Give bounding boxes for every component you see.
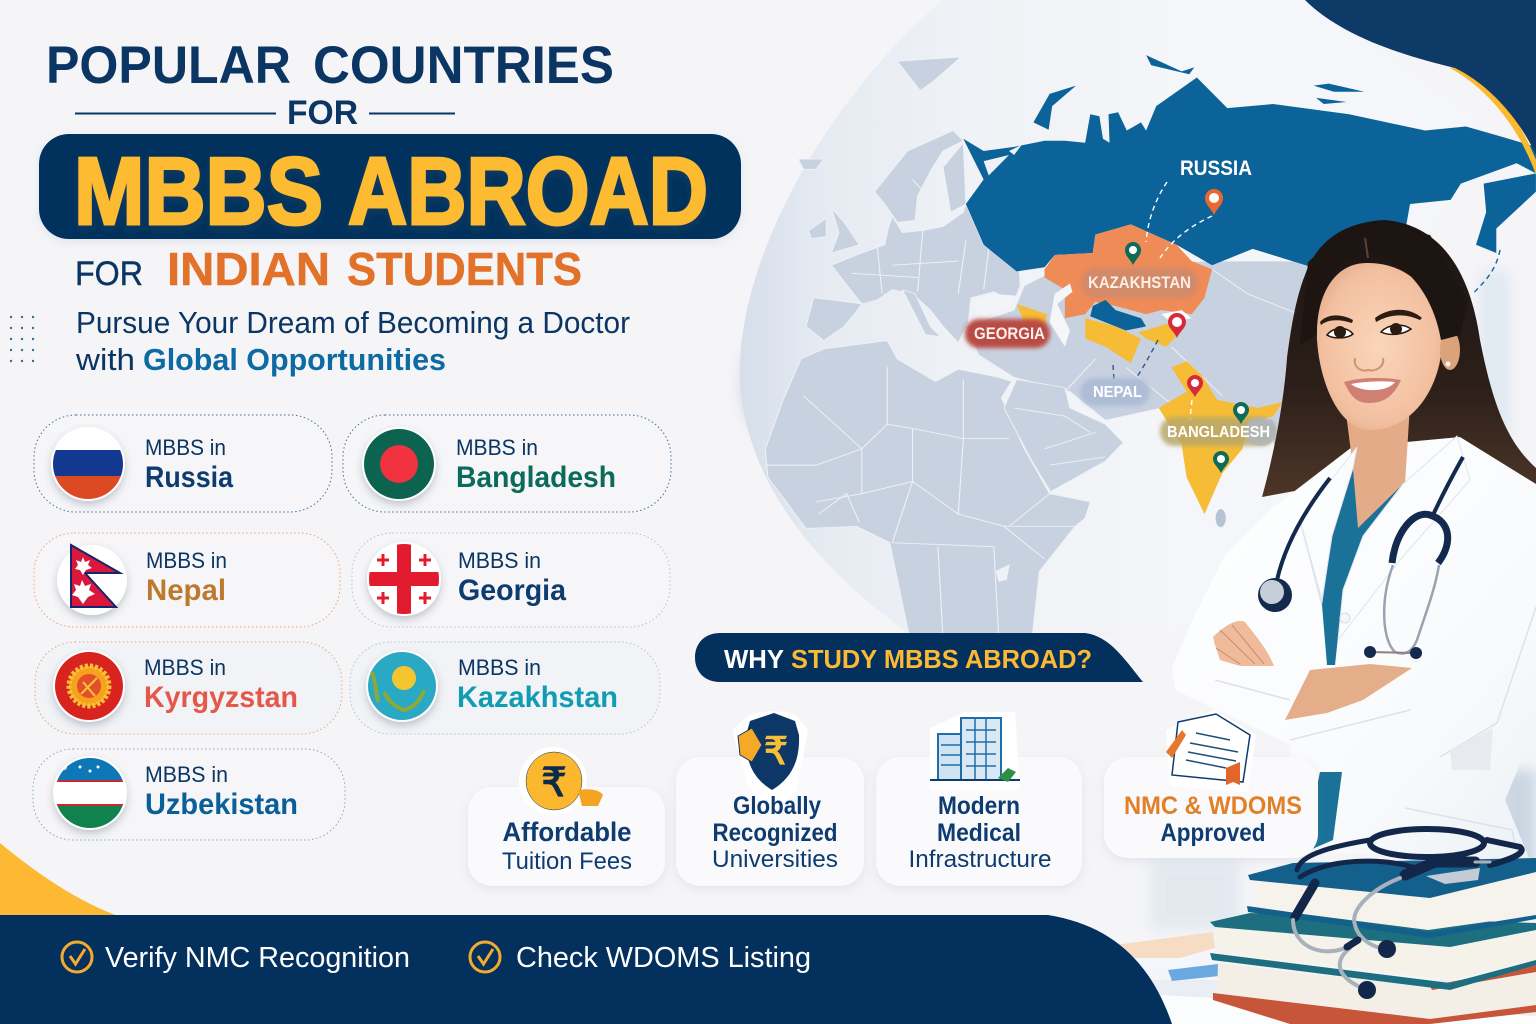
check: NMC: Verify NMC Recognition (105, 942, 410, 974)
Far-east Russia (1476, 173, 1536, 253)
bottom book pages (1217, 963, 1536, 1020)
card: Kyrgyzstan: Kyrgyzstan (144, 681, 298, 714)
country borders (765, 180, 1298, 640)
card: Kazakhstan: MBBS in (458, 655, 541, 680)
blue lake area (1090, 300, 1146, 330)
icon: shield: ₹ (764, 731, 788, 773)
Britain (831, 208, 859, 253)
card: Russia: MBBS in (145, 435, 226, 460)
feature: infrastructure: Medical (937, 819, 1021, 847)
card: Nepal (34, 533, 340, 627)
card: Uzbekistan (33, 749, 345, 840)
feature: recognized: Universities (712, 846, 838, 873)
Svalbard (897, 57, 961, 91)
desk front edge (1160, 995, 1536, 1024)
Russia (963, 78, 1536, 271)
White Sea gap (984, 145, 1022, 175)
icon: rupee coin: ₹ (541, 761, 567, 805)
top book pages (1255, 872, 1536, 930)
Black Sea (969, 294, 1017, 316)
subtitle (75, 305, 630, 377)
Arabia (1004, 379, 1123, 492)
brows (1320, 310, 1422, 325)
card: Georgia (352, 533, 670, 627)
card: Nepal: Nepal (146, 574, 226, 607)
eyes (1327, 323, 1411, 338)
coat shadow panel (1450, 728, 1493, 770)
top book covers (1247, 858, 1536, 938)
hair wisps (1525, 620, 1536, 678)
coat lapels (1300, 436, 1470, 640)
world map (740, 0, 1536, 640)
ear (1440, 330, 1460, 370)
for Indian students: INDIAN (167, 243, 330, 295)
coat folds (1215, 520, 1536, 860)
feature: affordable: Affordable (502, 817, 632, 847)
feature: affordable: Tuition Fees (502, 848, 632, 875)
India (1159, 361, 1283, 514)
Iceland (798, 159, 824, 169)
card: Kazakhstan (350, 642, 660, 734)
Madagascar small (996, 565, 1009, 581)
Sri Lanka (1216, 509, 1226, 527)
ear tips (1364, 646, 1422, 659)
feature: affordable (468, 747, 665, 886)
label: Nepal: NEPAL (1093, 384, 1142, 401)
Europe (831, 204, 1020, 343)
mouth (1344, 378, 1401, 403)
title line 1: POPULAR (46, 36, 291, 95)
desk (1110, 980, 1536, 1024)
hair part (1365, 238, 1368, 258)
Africa (765, 341, 1090, 640)
subtitle: Global Opportunities (143, 342, 446, 377)
label: Bangladesh: BANGLADESH (1167, 424, 1270, 441)
hair front (1300, 225, 1468, 345)
Finland (943, 143, 966, 212)
feature: approved: NMC & WDOMS (1124, 792, 1302, 820)
title block (10, 36, 741, 377)
feature: approved: Approved (1160, 819, 1266, 847)
country cards (33, 415, 671, 840)
top-right navy corner (1305, 0, 1536, 175)
feature: recognized: Globally (733, 792, 821, 820)
map pins (1125, 189, 1249, 473)
stethoscope neck tube (1277, 457, 1463, 580)
feature: recognized (676, 711, 864, 886)
for line: FOR (287, 94, 358, 132)
card: Kyrgyzstan: MBBS in (144, 655, 226, 680)
button (1340, 613, 1350, 623)
banner: MBBS (74, 138, 323, 245)
dot pattern (10, 316, 34, 362)
label: Kazakhstan: KAZAKHSTAN (1088, 273, 1191, 292)
neck (1345, 405, 1410, 530)
card: Kyrgyzstan (35, 642, 342, 734)
why heading: WHY (724, 644, 784, 674)
icon: rupee coin (519, 747, 603, 815)
title line 1 (46, 36, 614, 95)
subtitle: with (75, 342, 135, 377)
feature: approved (1104, 710, 1318, 858)
card: Uzbekistan: Uzbekistan (145, 788, 298, 821)
check: WDOMS: Check WDOMS Listing (516, 942, 811, 974)
doctor illustration (1172, 220, 1536, 860)
why heading: STUDY MBBS ABROAD? (791, 644, 1092, 674)
label: Nepal (1080, 378, 1150, 406)
Russian islands (1033, 51, 1364, 130)
globe disc (740, 0, 1480, 632)
hair back (1262, 220, 1536, 497)
icon: shield (732, 711, 808, 812)
feature: recognized: Recognized (712, 819, 838, 847)
middle book pages (1215, 927, 1536, 980)
yellow countries (1017, 304, 1182, 363)
subtitle: Pursue Your Dream of Becoming a Doctor (76, 305, 630, 340)
card: Bangladesh: Bangladesh (456, 461, 616, 494)
blurred lab background (742, 270, 1536, 930)
card: Georgia: Georgia (458, 574, 566, 607)
feature: infrastructure (876, 712, 1082, 886)
Russia label: RUSSIA (1180, 157, 1252, 180)
label: Georgia (965, 319, 1050, 348)
lower scrubs (1303, 772, 1342, 853)
silver fitting (1426, 868, 1480, 884)
bottom navy band (0, 915, 1172, 1024)
nose (1355, 358, 1383, 370)
land masses (765, 51, 1536, 640)
coat (1172, 437, 1536, 860)
Iberia (806, 298, 862, 341)
card: Kazakhstan: Kazakhstan (457, 681, 618, 714)
Italy (902, 290, 941, 337)
middle book covers (1210, 913, 1536, 990)
left hand (1213, 621, 1274, 666)
face (1317, 263, 1442, 430)
stethoscope chest piece (1258, 578, 1292, 612)
right forearm (1285, 664, 1412, 720)
finger lines (1216, 625, 1264, 664)
card: Bangladesh (343, 415, 671, 512)
card: Russia (34, 415, 332, 512)
scrubs (1322, 468, 1403, 665)
yellow corner triangle (0, 843, 118, 916)
chrome tubes (1384, 565, 1439, 654)
feature: infrastructure: Infrastructure (908, 846, 1052, 873)
label: Georgia: GEORGIA (974, 324, 1045, 343)
icon: certificate (1166, 710, 1256, 792)
banner (39, 134, 741, 245)
Kazakhstan region (1045, 224, 1212, 318)
title line 1: COUNTRIES (313, 36, 614, 95)
label: Bangladesh (1160, 417, 1276, 446)
Scandinavia (875, 131, 963, 222)
route dashes (1113, 182, 1500, 420)
Asia (966, 261, 1319, 469)
for Indian students: STUDENTS (347, 243, 582, 295)
stethoscope on books (1293, 829, 1522, 987)
card: Uzbekistan: MBBS in (145, 762, 228, 787)
Ireland (809, 218, 826, 239)
books and stethoscope (1210, 829, 1536, 1024)
card: Nepal: MBBS in (146, 548, 227, 573)
for Indian students: FOR (75, 255, 143, 293)
notebooks (1115, 932, 1219, 981)
why heading (695, 633, 1143, 682)
feature: infrastructure: Modern (938, 792, 1020, 820)
card: Bangladesh: MBBS in (456, 435, 538, 460)
stethoscope yoke (1392, 514, 1448, 563)
Caspian (1050, 284, 1072, 347)
label: Kazakhstan (1081, 268, 1198, 298)
card: Georgia: MBBS in (458, 548, 541, 573)
bottom book red cover (1213, 965, 1536, 1024)
banner: ABROAD (348, 138, 708, 245)
ear tips (1358, 940, 1396, 999)
card: Russia: Russia (145, 461, 233, 494)
icon: hospital building (930, 712, 1020, 790)
for Indian students (75, 243, 582, 295)
